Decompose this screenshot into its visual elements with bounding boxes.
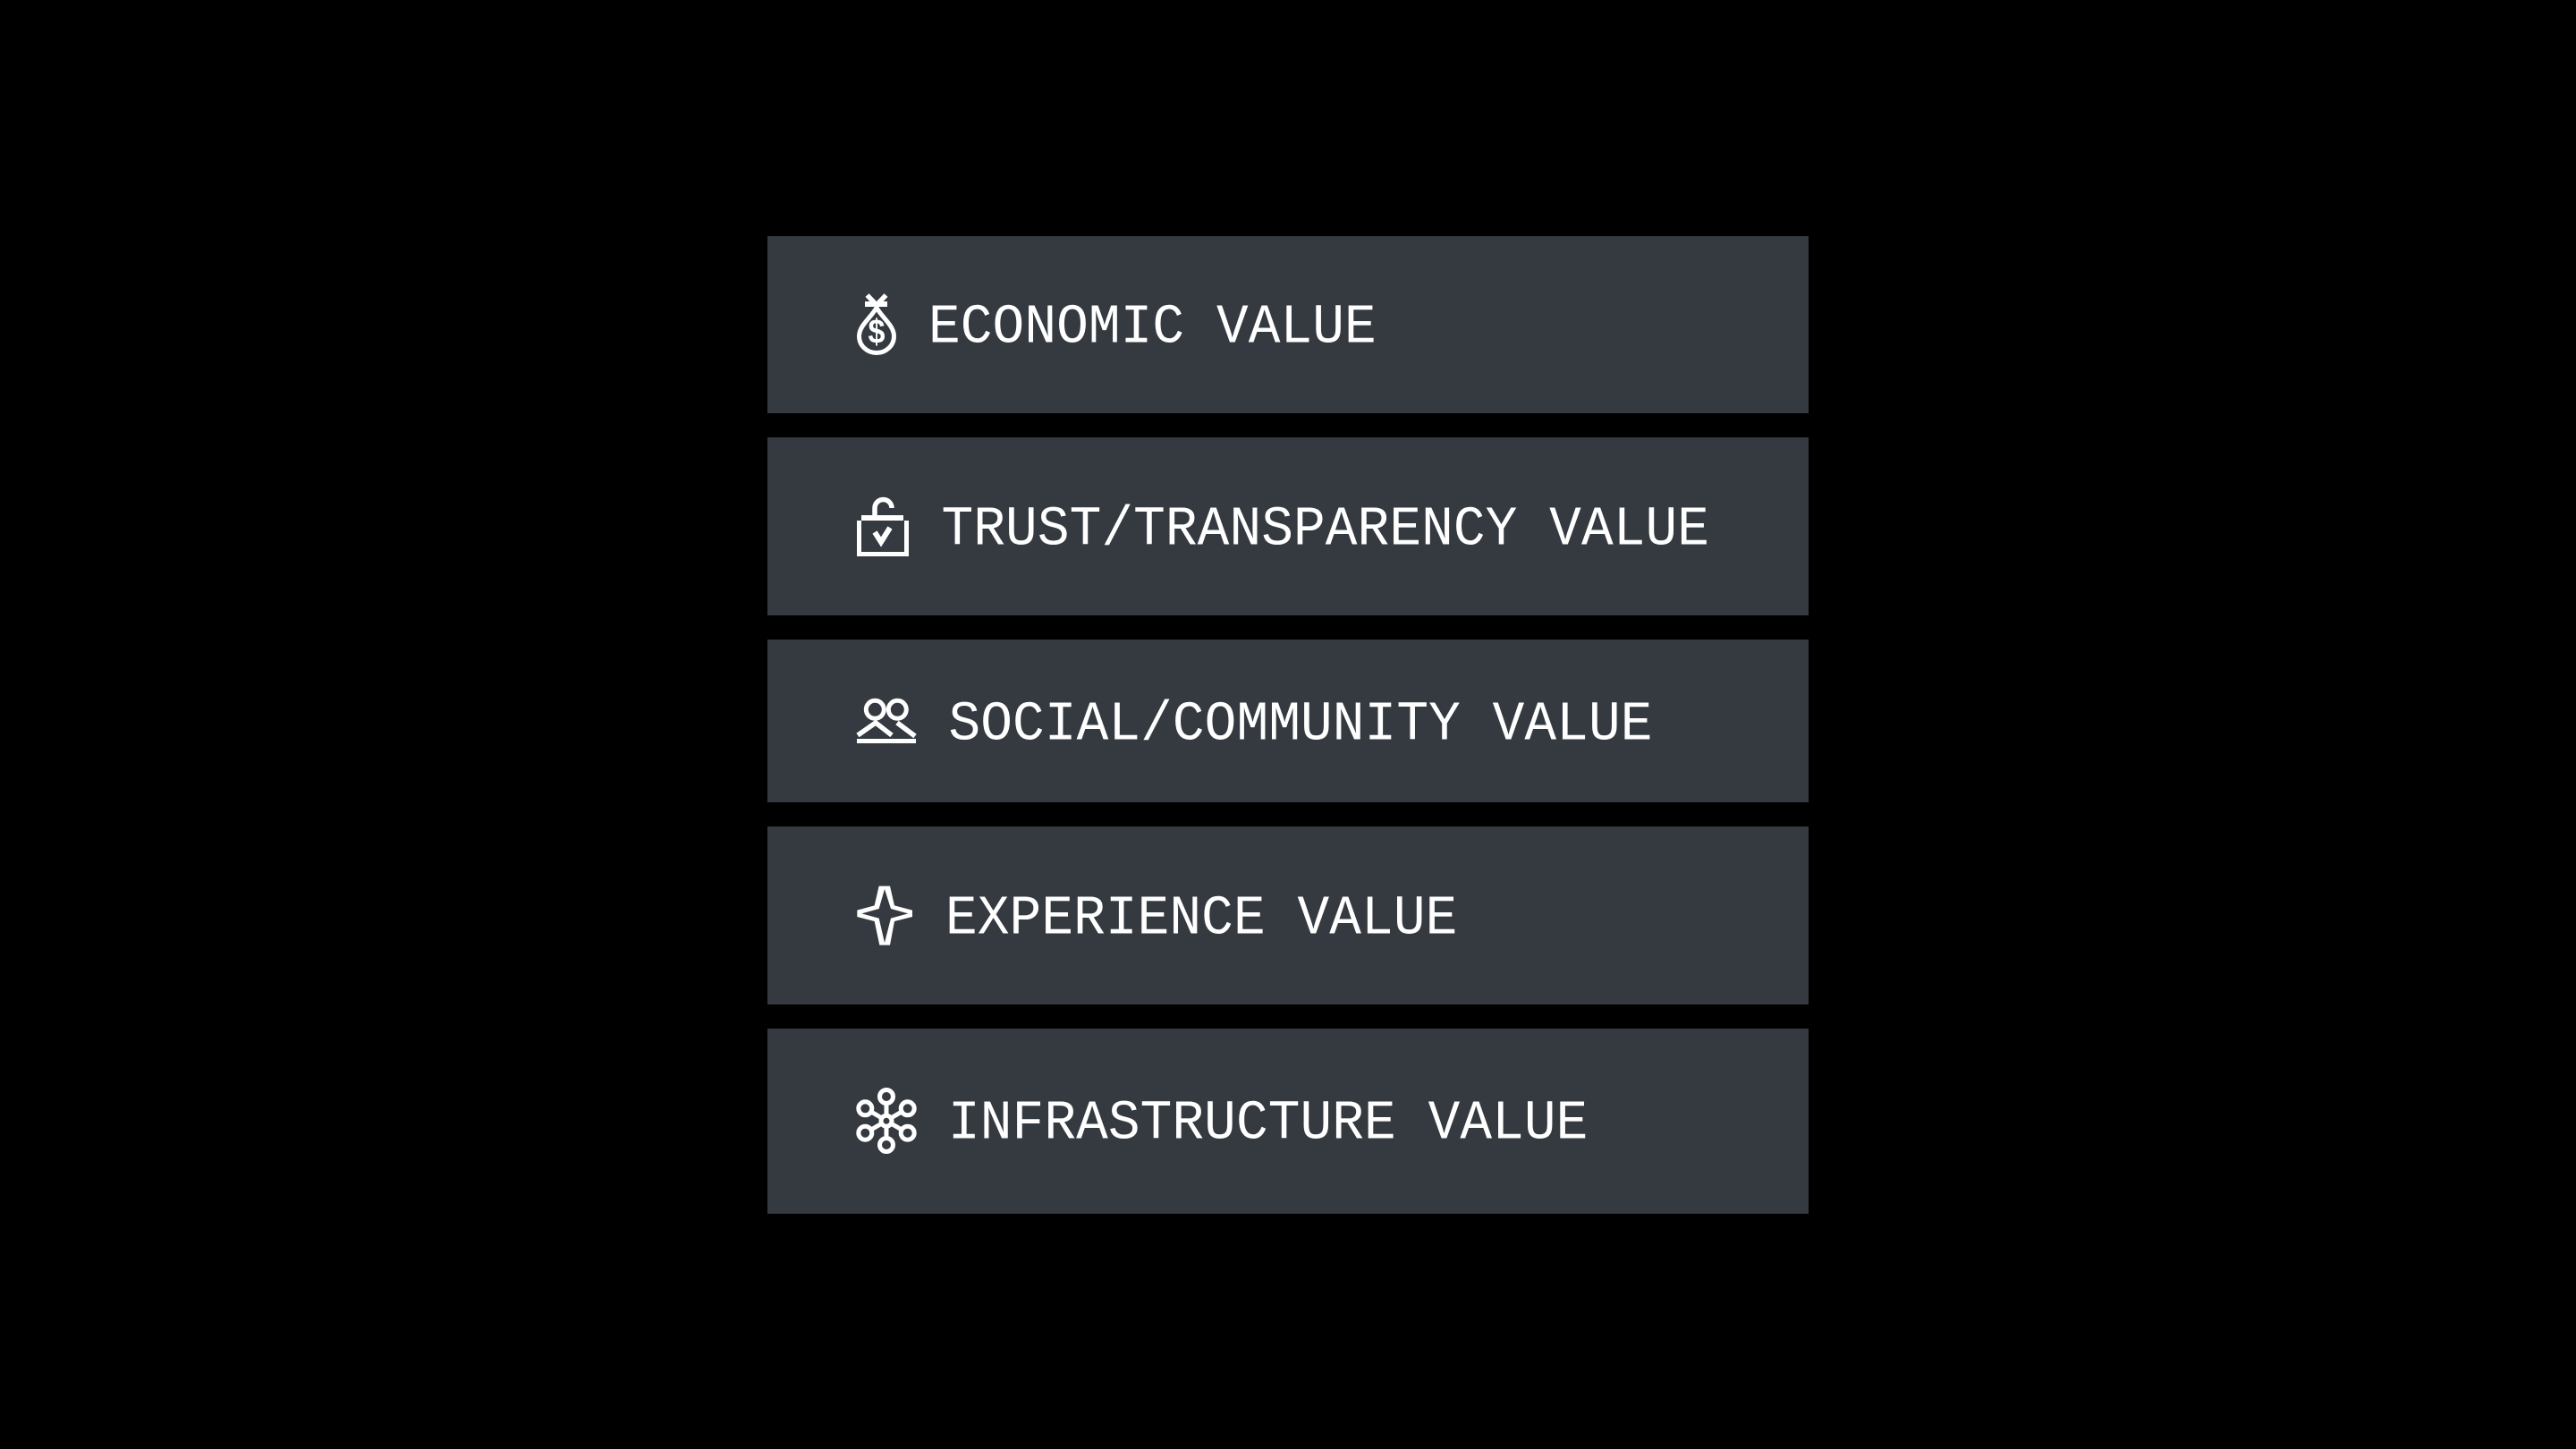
label: economic value: ECONOMIC VALUE [928, 296, 1377, 360]
icon: four-point star [857, 886, 912, 945]
panel: experience value [767, 826, 1809, 1004]
label: experience value: EXPERIENCE VALUE [945, 887, 1457, 951]
panel: social/community value [767, 640, 1809, 802]
panel: economic value [767, 236, 1809, 413]
icon: two people [857, 700, 916, 741]
panel: infrastructure value [767, 1029, 1809, 1214]
icon: money bag [859, 295, 894, 353]
icon: open lock with check [859, 499, 907, 555]
label: social/community value: SOCIAL/COMMUNITY VALUE [948, 693, 1653, 757]
label: trust/transparency value: TRUST/TRANSPARENCY VALUE [941, 498, 1709, 562]
icon: money bag: $ [868, 312, 886, 351]
label: infrastructure value: INFRASTRUCTURE VALUE [948, 1092, 1588, 1156]
icon: network nodes [859, 1089, 914, 1152]
panel: trust/transparency value [767, 437, 1809, 615]
